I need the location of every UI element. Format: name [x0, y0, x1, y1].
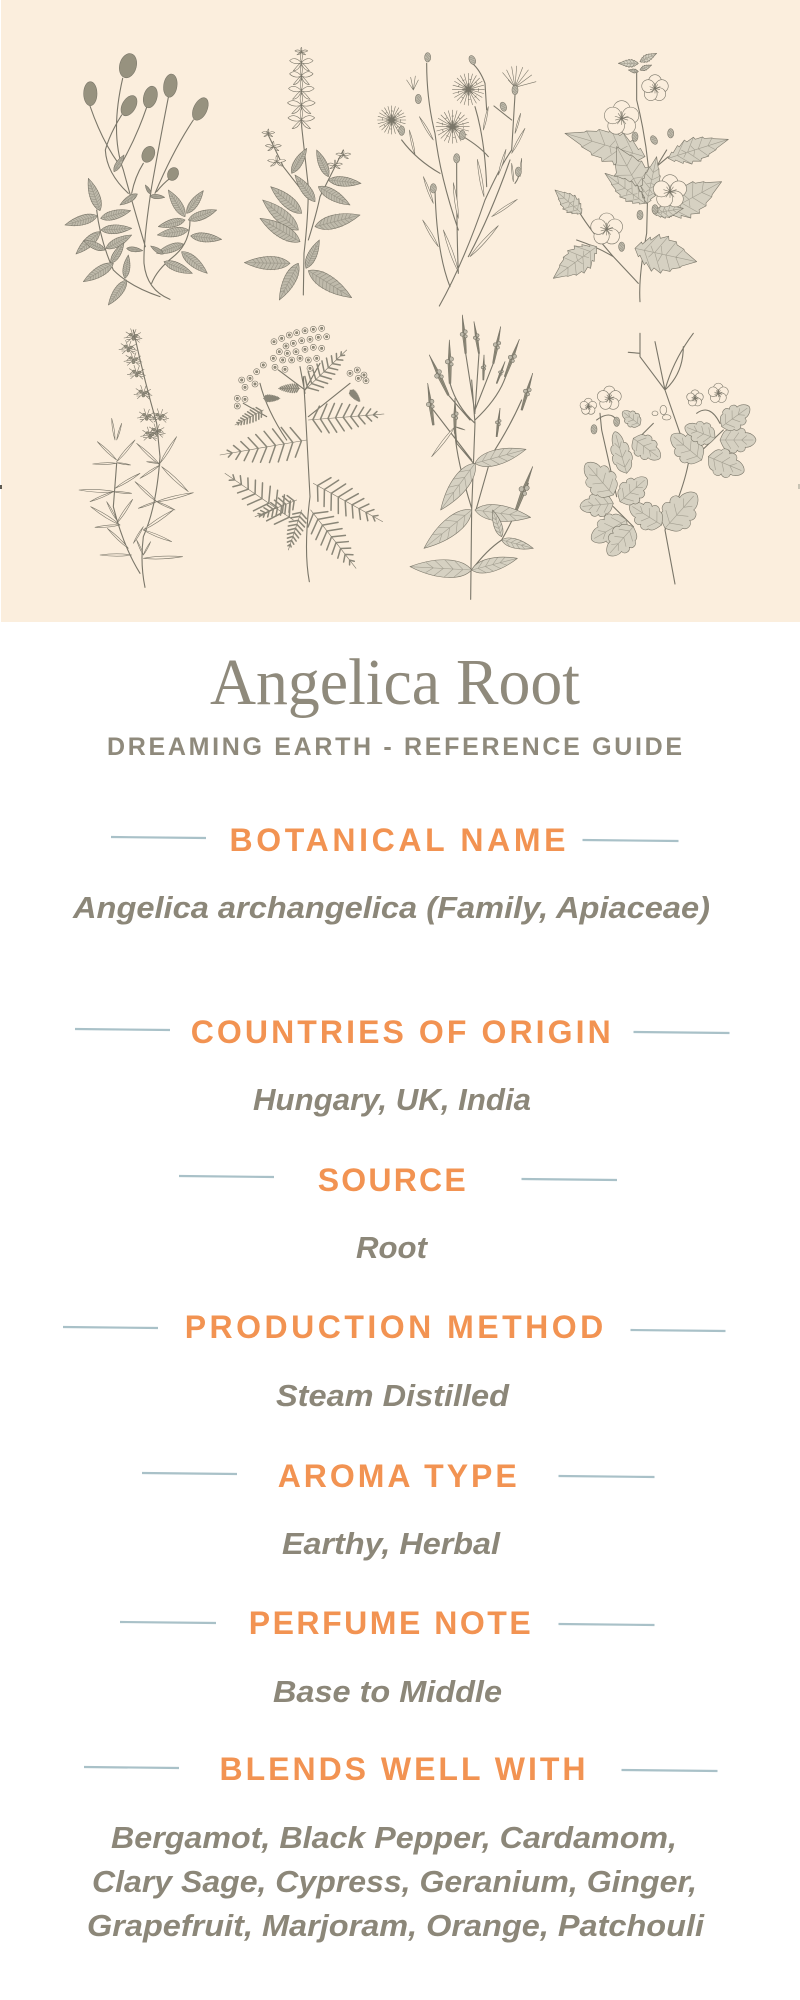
text: countries value: Hungary, UK, India	[253, 1082, 531, 1117]
text: blends value: Clary Sage, Cypress, Geranium, Ginger,	[92, 1864, 697, 1899]
plant: sage with flower spike	[244, 47, 362, 304]
text: source value: Root	[356, 1230, 429, 1265]
section heading: countries of origin	[75, 1014, 730, 1050]
section heading: botanical name: BOTANICAL NAME	[230, 822, 566, 858]
plant: celandine with lobed leaves	[575, 333, 757, 584]
text: perfume value: Base to Middle	[273, 1674, 502, 1709]
section heading: blends well with	[84, 1751, 718, 1787]
section heading: aroma type: AROMA TYPE	[278, 1458, 517, 1494]
text: blends value	[87, 1820, 705, 1943]
text: blends value: Grapefruit, Marjoram, Orange, Patchouli	[87, 1908, 705, 1943]
section heading: countries of origin: COUNTRIES OF ORIGIN	[191, 1014, 611, 1050]
section heading: blends well with: BLENDS WELL WITH	[220, 1751, 586, 1787]
text: aroma value: Earthy, Herbal	[282, 1526, 501, 1561]
section heading: aroma type	[142, 1458, 654, 1494]
subtitle: DREAMING EARTH - REFERENCE GUIDE	[107, 733, 682, 761]
text: blends value: Bergamot, Black Pepper, Cardamom,	[111, 1820, 677, 1855]
section heading: production method	[63, 1309, 726, 1345]
plant: savory with thin whorled leaves	[79, 329, 194, 587]
section heading: production method: PRODUCTION METHOD	[185, 1309, 603, 1345]
text: production value: Steam Distilled	[276, 1378, 510, 1413]
section heading: source	[179, 1162, 617, 1198]
edge marks	[0, 484, 800, 489]
title: Angelica Root	[210, 646, 580, 719]
section heading: perfume note	[120, 1605, 654, 1641]
plant: cornflower with thin stems	[377, 53, 536, 306]
panel: botanical illustrations background	[1, 0, 800, 622]
plant: vervain with spikes	[410, 315, 537, 599]
plant: mallow with broad leaves	[545, 50, 732, 302]
plant: burnet with oval flower heads	[64, 52, 222, 308]
plant: tansy with fern leaves and flower umbels	[216, 325, 390, 582]
section heading: perfume note: PERFUME NOTE	[249, 1605, 531, 1641]
text: botanical name value: Angelica archangelica (Family, Apiaceae)	[72, 890, 710, 925]
section heading: botanical name	[111, 822, 678, 858]
section heading: source: SOURCE	[318, 1162, 466, 1198]
